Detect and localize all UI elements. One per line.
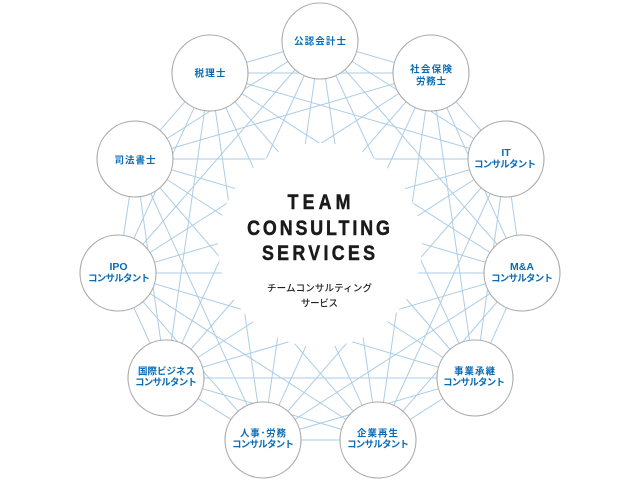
node: international business consultant: コンサルタント (135, 376, 197, 388)
node: corporate revitalization consultant: 企業再生 (357, 428, 398, 440)
node: IT consultant: コンサルタント (474, 158, 536, 170)
node: business succession consultant (437, 340, 513, 416)
subtitle: サービス (301, 298, 338, 310)
node: social insurance labor consultant: 社会保険 (410, 64, 452, 76)
node: M&A consultant (484, 235, 560, 311)
node: IT consultant: IT (501, 147, 511, 159)
node: certified public accountant (282, 3, 358, 79)
node: international business consultant: 国際ビジネス (138, 366, 195, 378)
node: HR and labor consultant: 人事･労務 (240, 428, 286, 440)
node: social insurance labor consultant (393, 35, 469, 111)
node: certified public accountant: 公認会計士 (294, 36, 346, 48)
node: corporate revitalization consultant (340, 402, 416, 478)
node: business succession consultant: 事業承継 (454, 366, 495, 378)
title: SERVICES (262, 242, 375, 265)
node: business succession consultant: コンサルタント (443, 376, 505, 388)
subtitle (267, 282, 372, 310)
title: CONSULTING (247, 217, 390, 240)
node: judicial scrivener: 司法書士 (114, 154, 156, 166)
node: HR and labor consultant (225, 402, 301, 478)
title (247, 191, 390, 265)
node: M&A consultant: コンサルタント (491, 272, 553, 284)
title: TEAM (288, 191, 350, 214)
node: tax accountant: 税理士 (194, 68, 226, 80)
node: IT consultant (468, 121, 544, 197)
node: IPO consultant: IPO (109, 261, 128, 273)
central white hole (218, 143, 422, 347)
node: international business consultant (128, 340, 204, 416)
network of connecting lines (118, 41, 522, 440)
node: HR and labor consultant: コンサルタント (232, 438, 294, 450)
node: corporate revitalization consultant: コンサルタント (347, 438, 409, 450)
subtitle: チームコンサルティング (267, 282, 372, 294)
node: M&A consultant: M&A (510, 261, 534, 273)
node: tax accountant (172, 35, 248, 111)
node: IPO consultant: コンサルタント (88, 272, 150, 284)
node: social insurance labor consultant: 労務士 (416, 76, 446, 88)
node: IPO consultant (80, 235, 156, 311)
node: judicial scrivener (97, 121, 173, 197)
